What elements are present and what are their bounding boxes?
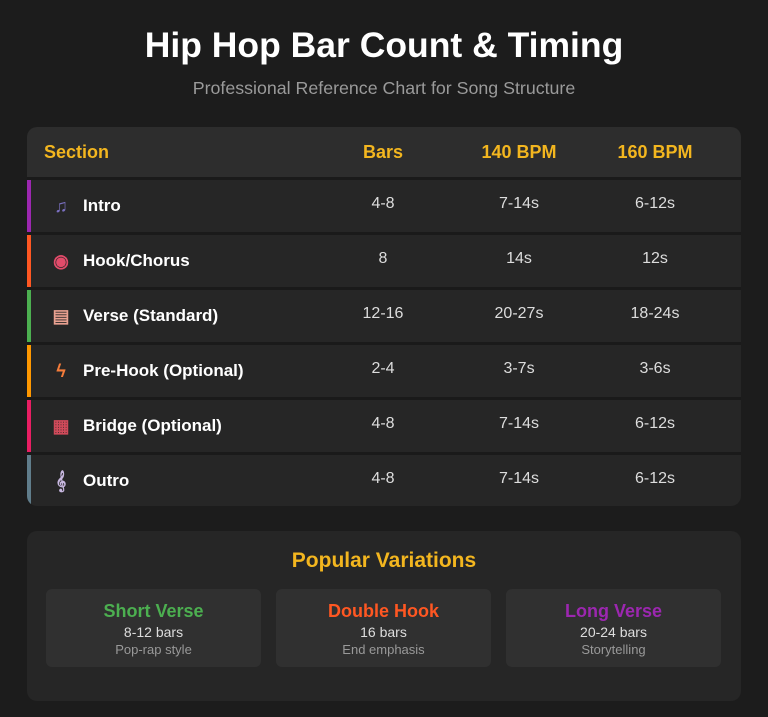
row: outro bbox=[27, 455, 741, 507]
card: long verse: Long Verse bbox=[565, 601, 662, 621]
row: intro: Intro bbox=[83, 196, 121, 215]
row: prehook: Pre-Hook (Optional) bbox=[83, 361, 244, 380]
card: double hook: Double Hook bbox=[328, 601, 439, 621]
row: prehook: 2-4 bbox=[371, 360, 395, 377]
row: hook: Hook/Chorus bbox=[83, 251, 190, 270]
row: bridge: 6-12s bbox=[635, 415, 675, 432]
row: intro: 4-8 bbox=[371, 195, 395, 212]
row: outro: Outro bbox=[83, 471, 129, 490]
table header: 160 BPM bbox=[617, 142, 693, 162]
row: outro: 4-8 bbox=[371, 470, 395, 487]
row: hook: 12s bbox=[642, 250, 668, 267]
row: verse: 20-27s bbox=[495, 305, 543, 322]
table header: Bars bbox=[363, 142, 403, 162]
row: verse: 12-16 bbox=[363, 305, 403, 322]
row: bridge: 7-14s bbox=[499, 415, 539, 432]
subtitle: Professional Reference Chart for Song Structure bbox=[193, 78, 575, 98]
row: outro: 6-12s bbox=[635, 470, 675, 487]
row: bridge bbox=[27, 400, 741, 452]
row: verse bbox=[27, 290, 741, 342]
card: double hook: 16 bars bbox=[360, 624, 407, 640]
row: intro: 7-14s bbox=[499, 195, 539, 212]
row: outro: 𝄞 bbox=[56, 471, 66, 491]
row: intro: ♫ bbox=[54, 196, 68, 216]
card: long verse bbox=[506, 589, 721, 667]
card: short verse: Pop-rap style bbox=[115, 642, 192, 657]
card: long verse: Storytelling bbox=[581, 642, 646, 657]
row: verse: Verse (Standard) bbox=[83, 306, 218, 325]
row: hook: 14s bbox=[506, 250, 532, 267]
row: hook bbox=[27, 235, 741, 287]
card: long verse: 20-24 bars bbox=[580, 624, 647, 640]
card: short verse bbox=[46, 589, 261, 667]
variations heading: Popular Variations bbox=[292, 549, 476, 572]
row: verse: 18-24s bbox=[631, 305, 679, 322]
row: prehook: ϟ bbox=[56, 361, 66, 381]
row: bridge: 4-8 bbox=[371, 415, 395, 432]
row: hook: 8 bbox=[379, 250, 387, 267]
panel: table bbox=[27, 127, 741, 506]
title: Hip Hop Bar Count & Timing bbox=[145, 25, 623, 65]
table header: Section bbox=[44, 142, 109, 162]
panel: popular variations bbox=[27, 531, 741, 701]
card: double hook bbox=[276, 589, 491, 667]
row: intro: 6-12s bbox=[635, 195, 675, 212]
table header bbox=[27, 127, 741, 177]
row: prehook: 3-6s bbox=[639, 360, 671, 377]
row: bridge: Bridge (Optional) bbox=[83, 416, 222, 435]
row: outro: 7-14s bbox=[499, 470, 539, 487]
row: bridge: ▦ bbox=[52, 416, 70, 436]
card: short verse: Short Verse bbox=[103, 601, 204, 621]
row: intro bbox=[27, 180, 741, 232]
row: prehook bbox=[27, 345, 741, 397]
card: short verse: 8-12 bars bbox=[124, 624, 183, 640]
row: verse: ▤ bbox=[52, 306, 70, 326]
row: hook: ◉ bbox=[53, 251, 69, 271]
table header: 140 BPM bbox=[481, 142, 557, 162]
card: double hook: End emphasis bbox=[342, 642, 425, 657]
row: prehook: 3-7s bbox=[503, 360, 535, 377]
